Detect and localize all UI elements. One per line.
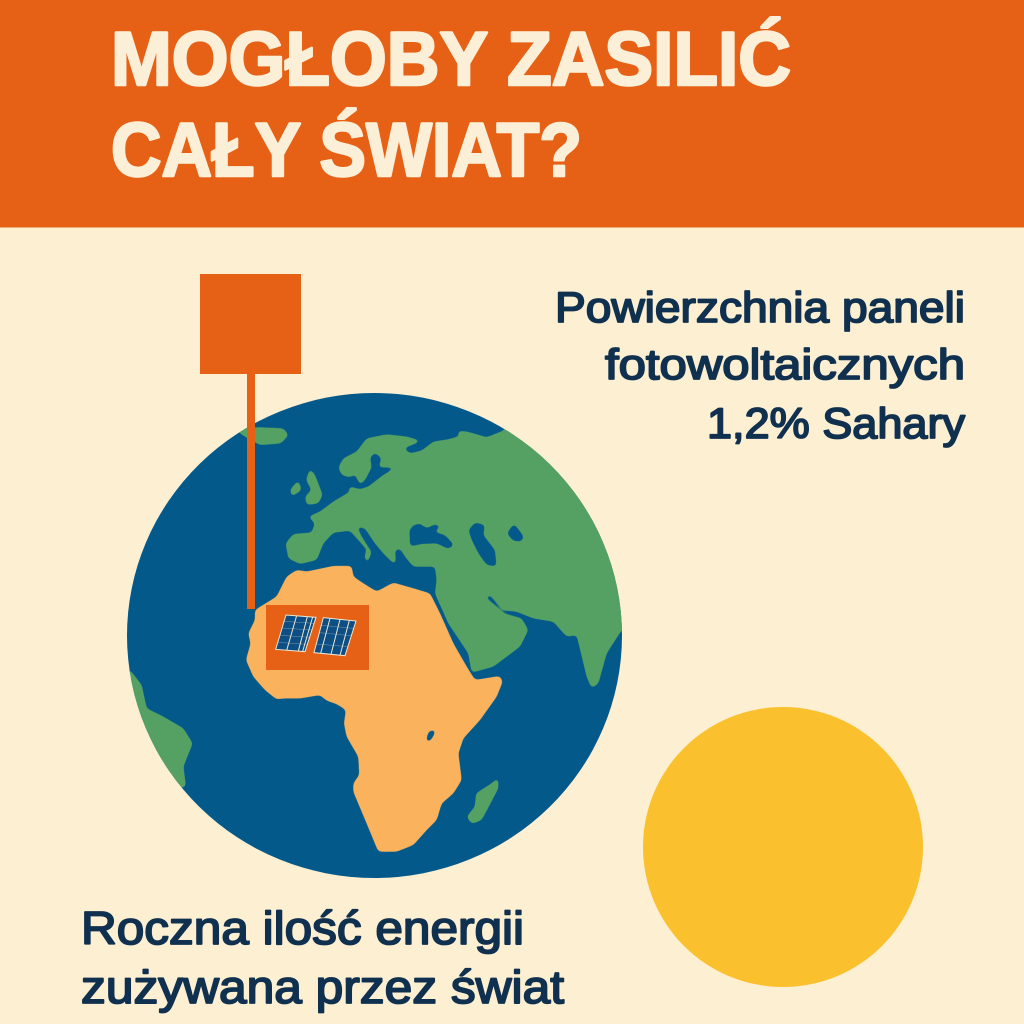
- solar panel right: [314, 618, 356, 656]
- green land: Eurasia, islands, South America, Madagascar: [130, 427, 622, 824]
- solar panels: [276, 615, 356, 656]
- label: world energy use: zużywana przez świat: [81, 961, 564, 1013]
- callout: marker square: [200, 274, 301, 374]
- label: world energy use: [81, 902, 564, 1013]
- label: panel area: Powierzchnia paneli: [555, 284, 965, 332]
- callout: connector line: [247, 374, 255, 609]
- globe: [127, 393, 622, 878]
- Africa: [246, 566, 503, 852]
- label: panel area: [555, 284, 966, 448]
- ocean: [127, 393, 622, 878]
- Sahara highlighted rectangle: [266, 605, 369, 670]
- sun circle: [643, 707, 923, 987]
- landmasses: [130, 427, 622, 852]
- label: panel area: fotowoltaicznych: [605, 341, 965, 389]
- solar area: [266, 605, 369, 670]
- title banner: [0, 0, 1024, 228]
- title: third line: CAŁY ŚWIAT?: [111, 108, 582, 193]
- solar panel left: [276, 615, 316, 652]
- label: world energy use: Roczna ilość energii: [81, 902, 524, 954]
- label: panel area: 1,2% Sahary: [707, 400, 966, 448]
- title: second line: MOGŁOBY ZASILIĆ: [111, 17, 791, 102]
